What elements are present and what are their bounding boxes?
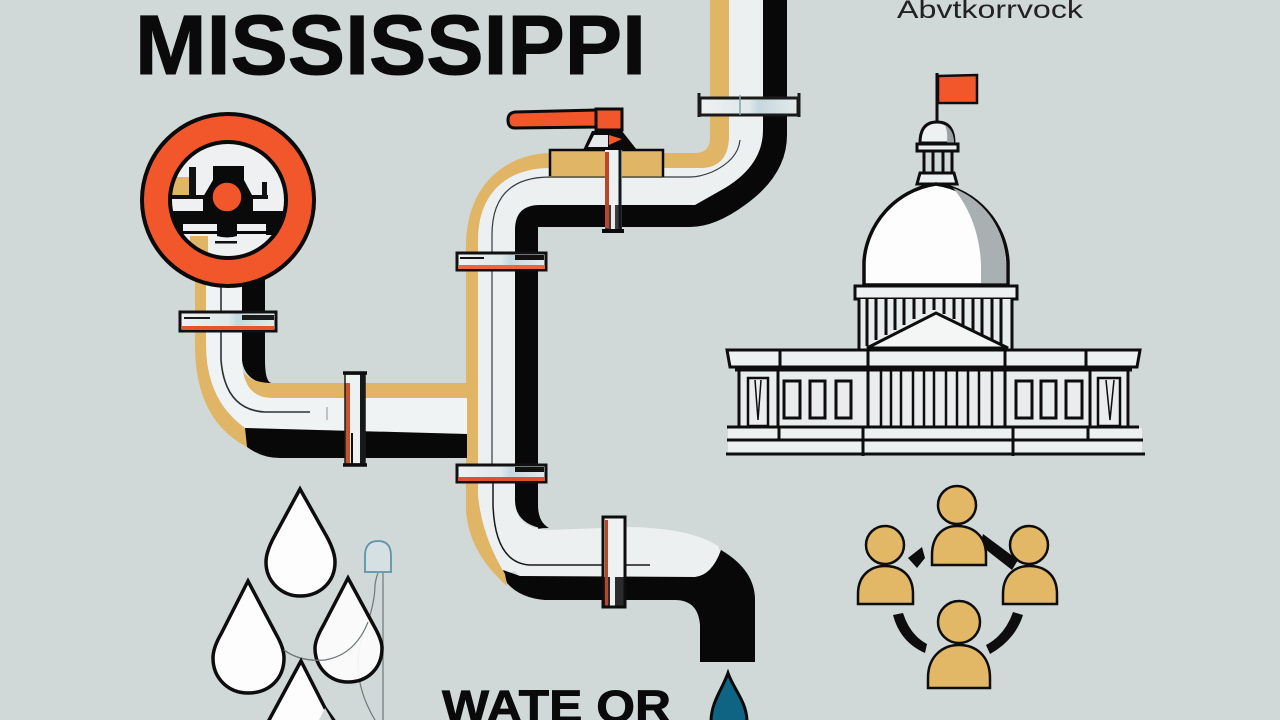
lower pipe and spout bbox=[466, 480, 755, 662]
main building body bbox=[727, 350, 1140, 427]
dome bbox=[864, 184, 1008, 285]
community group bbox=[858, 486, 1057, 688]
title: MISSISSIPPI bbox=[135, 0, 646, 92]
pediment bbox=[867, 313, 1008, 348]
wire overlay bbox=[284, 622, 368, 660]
flange top right bbox=[699, 93, 799, 117]
person bottom bbox=[928, 601, 990, 688]
upper pipe section bbox=[466, 0, 787, 583]
capitol building bbox=[726, 73, 1145, 456]
water drops bbox=[213, 489, 383, 720]
drop 4 bbox=[268, 661, 335, 720]
infographic canvas bbox=[140, 0, 1145, 720]
flag bbox=[937, 73, 977, 123]
vertical flange on upper pipe bbox=[602, 150, 624, 231]
blue water drop bbox=[711, 673, 747, 720]
wire harness bbox=[284, 573, 383, 720]
connector arcs bbox=[893, 534, 1023, 654]
valve with handle bbox=[508, 109, 663, 178]
drop 1 bbox=[266, 489, 335, 596]
drop 4 base mask bbox=[318, 708, 333, 720]
drop 3 bbox=[315, 578, 382, 682]
vertical tan riser bbox=[467, 250, 477, 482]
drop 2 bbox=[213, 581, 284, 693]
person left bbox=[858, 526, 913, 604]
drum and columns bbox=[855, 286, 1017, 350]
flange horizontal pipe bbox=[343, 373, 367, 465]
flange lower pipe bbox=[603, 517, 625, 607]
valve wheel icon bbox=[142, 114, 314, 286]
person right bbox=[1003, 526, 1057, 604]
flange lower joint bbox=[457, 465, 546, 482]
flange upper joint bbox=[457, 253, 546, 270]
pipeline system bbox=[180, 0, 799, 662]
left elbow pipe bbox=[195, 280, 467, 458]
cupola bbox=[917, 122, 958, 184]
flange left elbow bbox=[180, 312, 276, 331]
sensor bulb bbox=[365, 541, 391, 572]
steps bbox=[726, 427, 1145, 456]
person top bbox=[932, 486, 986, 565]
